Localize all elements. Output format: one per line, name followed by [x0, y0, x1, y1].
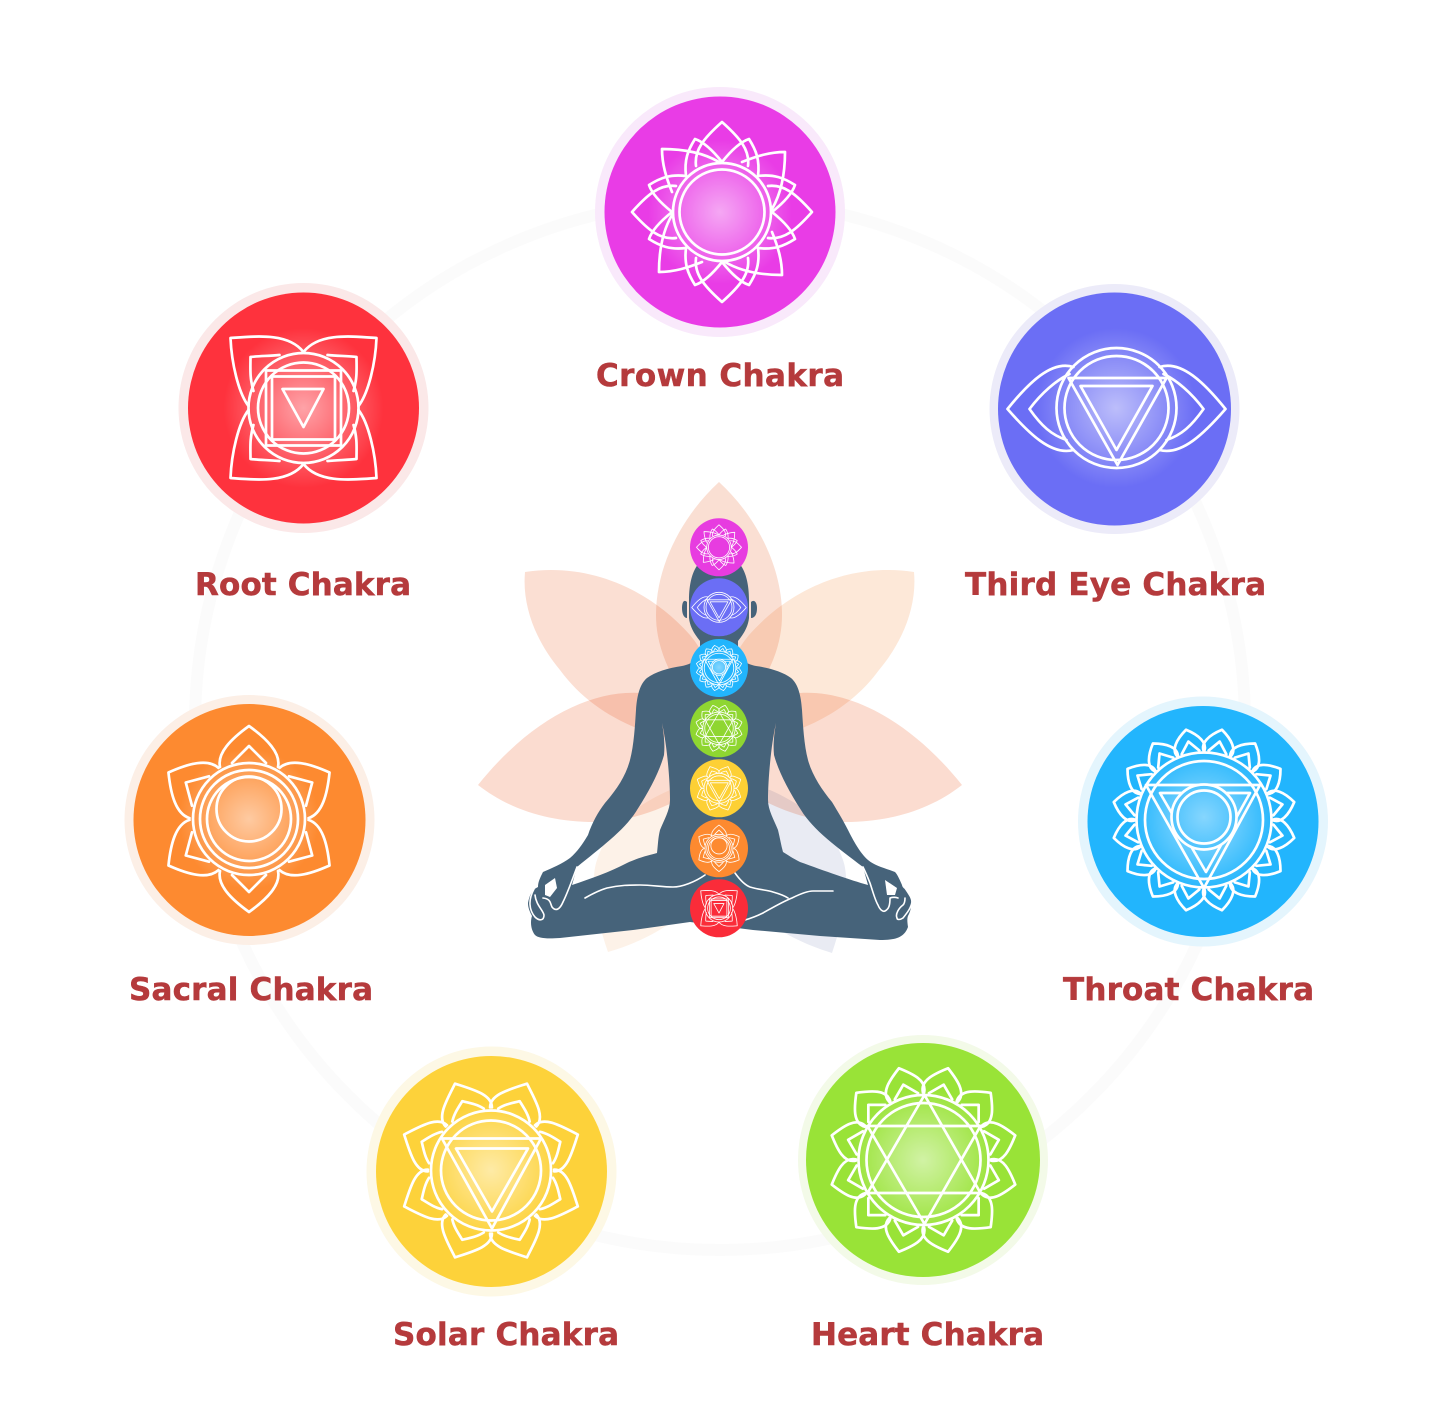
icon: root lotus: [230, 337, 376, 479]
label: root chakra: Root Chakra: [195, 567, 411, 603]
icon: heart lotus: [827, 1063, 1020, 1257]
label: solar chakra: Solar Chakra: [393, 1317, 619, 1353]
icon: throat lotus: [1111, 727, 1297, 913]
spine chakra: throat: [690, 639, 748, 697]
seated body silhouette: [528, 562, 912, 940]
spine chakra: heart: [690, 699, 748, 757]
label: heart chakra: Heart Chakra: [811, 1317, 1044, 1353]
spine chakra: root: [690, 879, 748, 937]
panel: sacral chakra: [124, 695, 374, 1008]
spine chakra: third eye: [690, 578, 748, 636]
spine chakra: sacral: [690, 819, 748, 877]
panel: third eye chakra: [965, 284, 1266, 603]
icon: solar lotus: [394, 1074, 588, 1267]
label: third eye chakra: Third Eye Chakra: [965, 567, 1266, 603]
lotus petals: [478, 482, 962, 953]
hand and leg contour lines: [530, 867, 912, 920]
ears: [682, 601, 687, 618]
panel: root chakra: [178, 283, 428, 603]
central figure: meditating silhouette with lotus: [478, 482, 962, 953]
label: sacral chakra: Sacral Chakra: [129, 972, 373, 1008]
panel: heart chakra: [798, 1035, 1048, 1353]
icon: crown lotus: [632, 122, 812, 302]
panel: throat chakra: [1063, 696, 1328, 1008]
panel: crown chakra: [595, 87, 845, 394]
icon: third eye lotus: [1008, 348, 1226, 468]
panel: solar chakra: [366, 1046, 619, 1353]
label: crown chakra: Crown Chakra: [596, 358, 844, 394]
label: throat chakra: Throat Chakra: [1063, 972, 1314, 1008]
icon: sacral lotus: [154, 726, 344, 912]
spine chakra: crown: [690, 518, 748, 576]
connecting ring: [195, 200, 1245, 1250]
spine chakra: solar: [690, 759, 748, 817]
